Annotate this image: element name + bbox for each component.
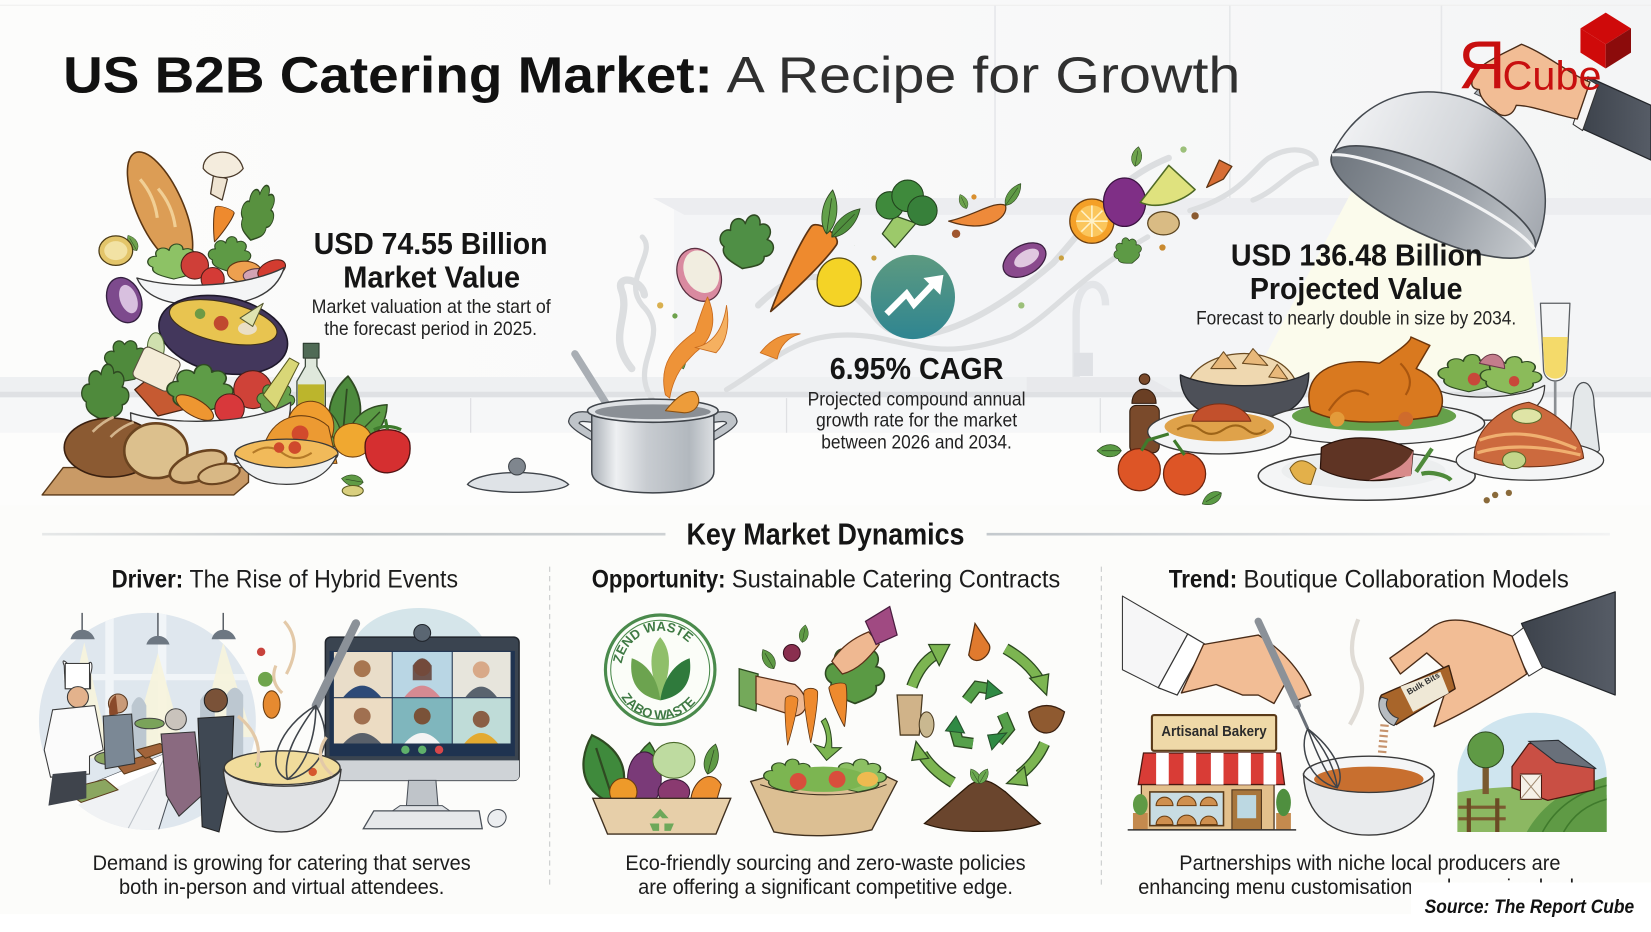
icon: lower salad bowl: [131, 345, 299, 465]
icon: farm with barn: [1457, 712, 1607, 832]
text: trend description: enhancing menu customisation and perceived value: [1138, 876, 1596, 899]
text: opportunity description: are offering a significant competitive edge.: [638, 876, 1013, 899]
icon: purple turnip: [1103, 178, 1146, 226]
icon: mushroom: [203, 152, 243, 200]
icon: recycled crate of vegetables: [574, 729, 731, 834]
table food: [63, 743, 168, 802]
heading: driver: The Rise of Hybrid Events: [190, 566, 458, 594]
icon: hand holding cloche: [1472, 44, 1651, 160]
illustration: spotlight beam: [1253, 179, 1543, 379]
icon: crumbs leaf: [341, 473, 364, 496]
icon: broccoli: [876, 180, 937, 247]
stat: projected value: Projected Value: [1250, 272, 1463, 306]
icon: cutting board: [42, 468, 248, 495]
panel: trend: [1122, 566, 1643, 899]
icon: red onion: [100, 273, 148, 328]
text: opportunity description: [625, 852, 1026, 899]
stat: cagr: between 2026 and 2034.: [821, 433, 1012, 454]
icon: compost cycle: [897, 623, 1065, 831]
icon: hands exchanging carrots: [739, 607, 897, 760]
icon: baguette: [114, 143, 206, 274]
icon: roast chicken platter: [1266, 337, 1485, 444]
icon: pot lid: [468, 458, 569, 492]
logo: RCube: Я: [1458, 28, 1506, 103]
stat: market value: Market Value: [343, 260, 520, 294]
icon: big carrot: [758, 189, 865, 320]
icon: steak plate: [1258, 438, 1475, 500]
icon: small leaves, potato and seeds: [657, 146, 1199, 370]
logo: RCube: [1458, 13, 1631, 103]
icon: cagr trend circle: [871, 255, 955, 339]
icon: stockpot with ladle: [569, 354, 737, 493]
heading: opportunity: Sustainable Catering Contracts: [732, 566, 1060, 594]
icon: orange splash: [664, 297, 800, 398]
icon: whisk and floating ingredients: [238, 621, 356, 779]
illustration: cascading food stack: [42, 143, 410, 496]
panel: driver: [32, 566, 519, 899]
icon: tomatoes: [1097, 434, 1512, 509]
text: driver description: Demand is growing for catering that serves: [93, 852, 471, 875]
chef: [44, 661, 124, 806]
source credit: Source: The Report Cube: [1425, 897, 1634, 918]
stat: cagr: 6.95% CAGR: [830, 352, 1003, 386]
icon: small carrot and herb: [99, 181, 281, 265]
stat: cagr: Projected compound annual: [808, 389, 1026, 410]
heading: trend: Boutique Collaboration Models: [1244, 566, 1569, 594]
stat: market value: Market valuation at the start of: [312, 297, 551, 318]
title: [63, 47, 1240, 104]
icon: tiny carrot: [1207, 160, 1232, 187]
illustration: flying ingredients: [657, 146, 1232, 398]
illustration: catering event scene: [32, 613, 256, 832]
icon: bread loaf and slices: [64, 417, 242, 489]
icon: zero waste badge: ZEND WASTE: [613, 622, 694, 664]
stat: market value: the forecast period in 2025.: [324, 319, 537, 340]
icon: lime wedge: [1140, 165, 1195, 205]
stat: projected value: Forecast to nearly double in size by 2034.: [1196, 308, 1516, 329]
icon: orange half: [1070, 199, 1114, 243]
icon: video call monitor: [325, 608, 519, 831]
icon: artisanal bakery shop: Artisanal Bakery: [1161, 724, 1267, 740]
text: opportunity description: Eco-friendly sourcing and zero-waste policies: [625, 852, 1026, 875]
icon: right hand pouring spice: [1350, 592, 1615, 785]
icon: salad bowl right: [1437, 354, 1545, 420]
text: trend description: [1138, 852, 1596, 899]
icon: pasta plate: [1148, 404, 1291, 454]
icon: zero waste badge: [604, 613, 716, 726]
icon: right hand pouring spice: Bulk Bits: [1405, 670, 1442, 697]
stat: cagr: growth rate for the market: [816, 411, 1018, 432]
heading: opportunity: Opportunity:: [592, 566, 725, 594]
logo: RCube: Cube: [1503, 53, 1602, 99]
icon: layered dessert plate: [1456, 402, 1604, 480]
heading: driver: Driver:: [112, 566, 183, 594]
guests: [161, 689, 234, 832]
illustration: served banquet: [1097, 303, 1604, 509]
icon: leaves left of stack: [82, 331, 164, 421]
icon: artisanal bakery shop: [1128, 715, 1296, 830]
stat: market value: USD 74.55 Billion: [314, 227, 548, 261]
icon: red bell pepper: [365, 419, 410, 473]
stat: projected value: [1196, 238, 1516, 329]
icon: purple bowl: [151, 284, 295, 386]
icon: mixing bowl with sauce: [1304, 729, 1434, 835]
icon: red onion slice: [997, 236, 1052, 284]
text: trend description: Partnerships with niche local producers are: [1179, 852, 1560, 875]
icon: zero waste badge: ZABO WASTE: [621, 692, 696, 720]
icon: lemon: [817, 258, 861, 306]
illustration: steam and swirl: [620, 150, 1316, 400]
icon: pepper mill: [1130, 374, 1159, 453]
title: US B2B Catering Market:: [63, 47, 713, 104]
icon: takeaway salad tray: [751, 759, 897, 836]
icon: green leaves right: [287, 375, 396, 457]
text: driver description: [93, 852, 471, 899]
icon: radish slice: [668, 241, 730, 309]
icon: soup bowl: [223, 751, 341, 832]
section heading: key market dynamics: Key Market Dynamics: [687, 517, 964, 551]
icon: left hand with whisk: [1122, 596, 1311, 729]
icon: olive oil bottle: [297, 343, 325, 417]
source credit: [1411, 883, 1651, 925]
icon: side dish bowl: [1180, 349, 1309, 420]
heading: opportunity: [592, 566, 1060, 594]
icon: champagne flute: [1540, 303, 1570, 433]
icon: top salad bowl: [137, 237, 289, 305]
icon: salt shaker: [1569, 383, 1599, 454]
stat: projected value: USD 136.48 Billion: [1231, 238, 1483, 272]
text: driver description: both in-person and virtual attendees.: [119, 876, 444, 899]
icon: orange carrot: [949, 181, 1025, 226]
panel: opportunity: [582, 566, 1066, 899]
stat: cagr: [808, 352, 1026, 454]
stat: market value: [312, 227, 551, 340]
dividers: [550, 567, 1101, 887]
icon: silver cloche: [1318, 31, 1592, 280]
heading: trend: Trend:: [1169, 566, 1237, 594]
icon: lettuce leaf: [716, 210, 779, 273]
icon: pasta bowl: [235, 416, 338, 484]
server: [103, 694, 164, 769]
title: A Recipe for Growth: [727, 47, 1240, 104]
